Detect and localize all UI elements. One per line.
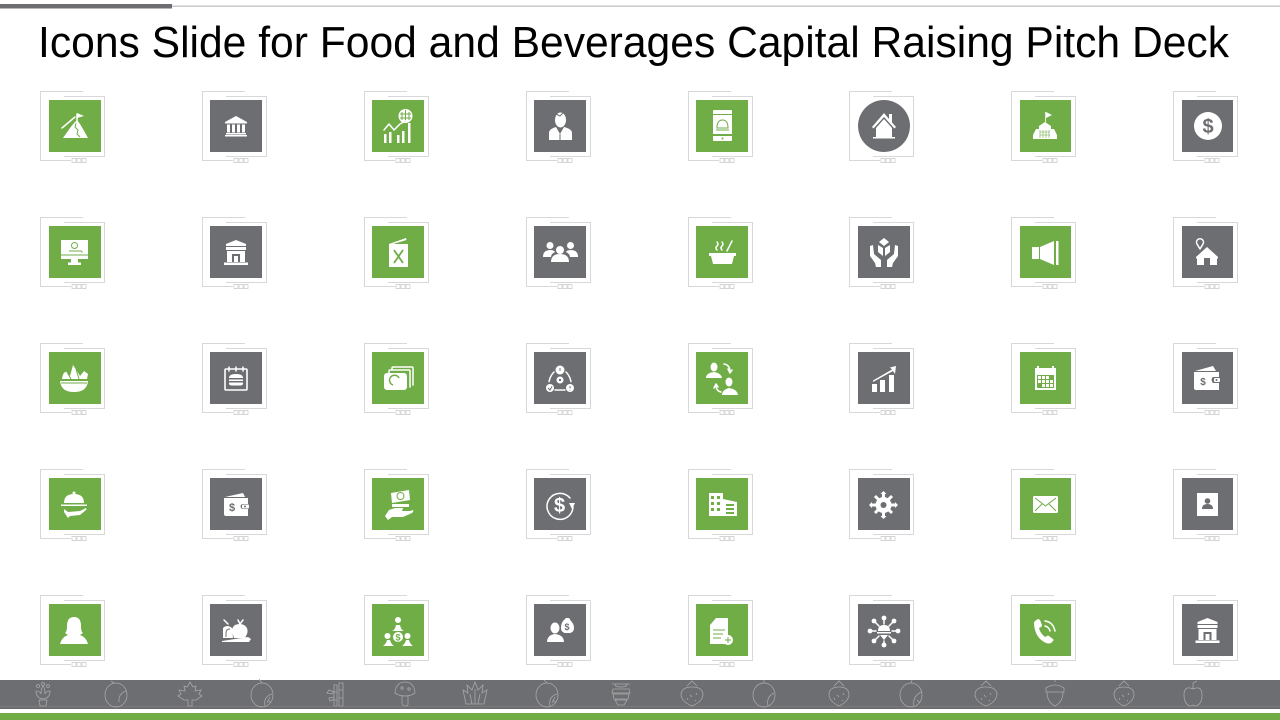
tile: salad bowl bbox=[40, 344, 104, 414]
top accent bar bbox=[0, 4, 1280, 8]
band icon: citrus bbox=[251, 679, 273, 707]
tile: gear network bbox=[850, 470, 914, 540]
band icon: mushroom bbox=[395, 682, 415, 706]
band icon: beehive bbox=[612, 684, 630, 705]
tile: cloche on hand bbox=[40, 470, 104, 540]
tile: wallet bbox=[202, 470, 266, 540]
tile: house in circle bbox=[850, 92, 914, 162]
band icon: apple bbox=[1184, 681, 1202, 706]
band icon: citrus bbox=[900, 680, 922, 707]
tile: dollar cycle bbox=[526, 470, 590, 540]
tile: process cycle bbox=[526, 344, 590, 414]
tile: hot bowl bbox=[688, 218, 752, 288]
tile: speaker bbox=[1012, 218, 1076, 288]
tile: office buildings bbox=[688, 470, 752, 540]
tile: person with money bag bbox=[526, 596, 590, 666]
tile: dollar coin: $ bbox=[1202, 116, 1214, 138]
tile: wallet: $ bbox=[229, 502, 235, 514]
tile: monitor with coin bbox=[40, 218, 104, 288]
tile: gate bbox=[202, 218, 266, 288]
tile: phone call bbox=[1012, 596, 1076, 666]
band icon: strawberry bbox=[829, 681, 849, 706]
band icon: orange bbox=[105, 681, 127, 707]
tile: menu card bbox=[364, 218, 428, 288]
band icon: aloe bbox=[463, 682, 487, 704]
tile: bank bbox=[202, 92, 266, 162]
tile: location house bbox=[1174, 218, 1238, 288]
tile: cash notes bbox=[364, 344, 428, 414]
band icon: flower bbox=[36, 682, 50, 706]
tile: phone with cloche bbox=[688, 92, 752, 162]
tile: gate bbox=[1174, 596, 1238, 666]
band icon: citrus bbox=[536, 680, 558, 707]
band icon: strawberry bbox=[1114, 681, 1134, 706]
band icon: acorn bbox=[1046, 680, 1064, 706]
band icon: strawberry bbox=[975, 681, 997, 706]
tile: person with money bag: $ bbox=[564, 622, 570, 632]
tile: envelope bbox=[1012, 470, 1076, 540]
title: Icons Slide for Food and Beverages Capital Raising Pitch Deck bbox=[38, 19, 1229, 67]
tile: network with dollar bbox=[364, 596, 428, 666]
footer icon band bbox=[0, 679, 1280, 720]
tile: woman avatar bbox=[40, 596, 104, 666]
tile: calendar bbox=[1012, 344, 1076, 414]
tile: hand with cash bbox=[364, 470, 428, 540]
tile: wallet: $ bbox=[1200, 377, 1206, 388]
tile: government building bbox=[1012, 92, 1076, 162]
tile: businessman bbox=[526, 92, 590, 162]
tile: network with dollar: $ bbox=[395, 632, 401, 642]
tile: dollar coin bbox=[1174, 92, 1238, 162]
tile: wallet bbox=[1174, 344, 1238, 414]
band icon: maple leaf bbox=[178, 682, 202, 706]
band icon: bamboo bbox=[327, 683, 343, 706]
icon grid bbox=[40, 92, 1238, 666]
tile: contact card bbox=[1174, 470, 1238, 540]
tile: people exchange bbox=[688, 344, 752, 414]
tile: mountain flag bbox=[40, 92, 104, 162]
tile: chart with globe bbox=[364, 92, 428, 162]
tile: team bbox=[526, 218, 590, 288]
tile: helmet network bbox=[850, 596, 914, 666]
tile: growth chart bbox=[850, 344, 914, 414]
tile: burger calendar bbox=[202, 344, 266, 414]
tile: apple and carrot bbox=[202, 596, 266, 666]
band icon: strawberry bbox=[681, 681, 703, 706]
tile: hands holding plant bbox=[850, 218, 914, 288]
tile: dollar cycle: $ bbox=[554, 495, 565, 517]
band icon: orange bbox=[753, 680, 775, 707]
tile: document add bbox=[688, 596, 752, 666]
